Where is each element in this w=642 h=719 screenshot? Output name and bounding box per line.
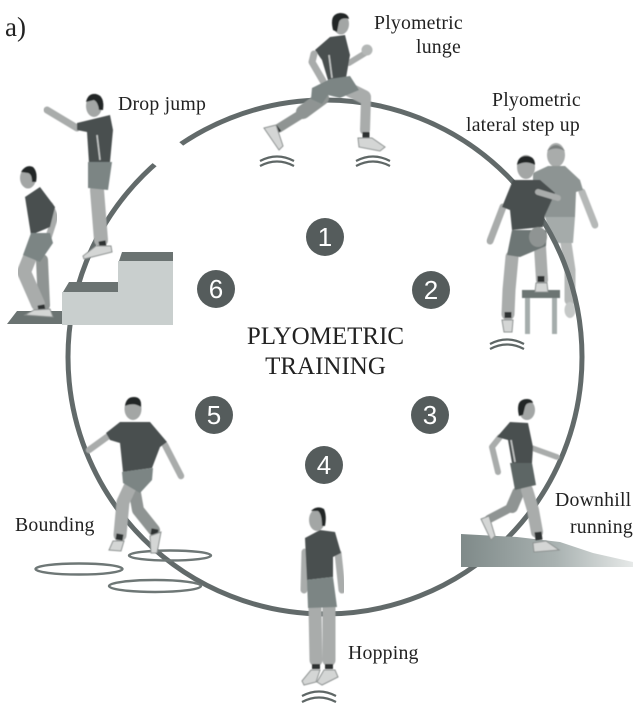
label: downhill running: running — [570, 516, 633, 538]
icon: step up impact mark — [490, 340, 524, 349]
label: plyometric lateral step up: lateral step up — [466, 114, 580, 136]
heading: plyometric training: TRAINING — [265, 353, 386, 380]
stool — [522, 290, 560, 334]
label: a): a) — [5, 12, 26, 42]
figure 6: drop jump upper person — [47, 94, 113, 259]
numbered badges 1 to 6 — [195, 218, 450, 484]
figure 2: plyometric lateral step up — [490, 155, 560, 334]
icon: hopping impact mark — [302, 692, 336, 702]
numbered badges 1 to 6: 5 — [207, 400, 221, 430]
figure 6: stairs — [7, 252, 173, 325]
heading: plyometric training — [247, 323, 404, 380]
heading: plyometric training: PLYOMETRIC — [247, 323, 404, 350]
figure 5: bounding hoops — [36, 550, 211, 592]
numbered badges 1 to 6: 2 — [424, 275, 438, 305]
figure 1: plyometric lunge — [264, 13, 385, 151]
numbered badges 1 to 6: 6 — [209, 274, 223, 304]
figure: back person of lateral step up — [533, 143, 595, 318]
numbered badges 1 to 6: 1 — [318, 222, 332, 252]
label: hopping: Hopping — [348, 642, 419, 664]
label: plyometric lateral step up: Plyometric — [492, 89, 581, 111]
figure 5: bounding — [89, 397, 181, 553]
label: plyometric lunge: lunge — [416, 36, 461, 58]
figure 6: drop jump lower person — [20, 166, 55, 317]
numbered badges 1 to 6: 3 — [423, 400, 437, 430]
slope — [461, 534, 633, 567]
numbered badges 1 to 6: 4 — [317, 450, 331, 480]
label: downhill running: Downhill — [555, 489, 632, 511]
figure 3: downhill running — [461, 399, 633, 567]
icon: lunge impact marks — [260, 156, 390, 166]
label: drop jump: Drop jump — [118, 93, 206, 115]
label: bounding: Bounding — [15, 514, 95, 536]
label: plyometric lunge: Plyometric — [374, 12, 463, 34]
ring gap near drop jump — [146, 132, 188, 172]
figure 4: hopping — [302, 507, 342, 685]
ring: training cycle circle — [68, 100, 582, 614]
